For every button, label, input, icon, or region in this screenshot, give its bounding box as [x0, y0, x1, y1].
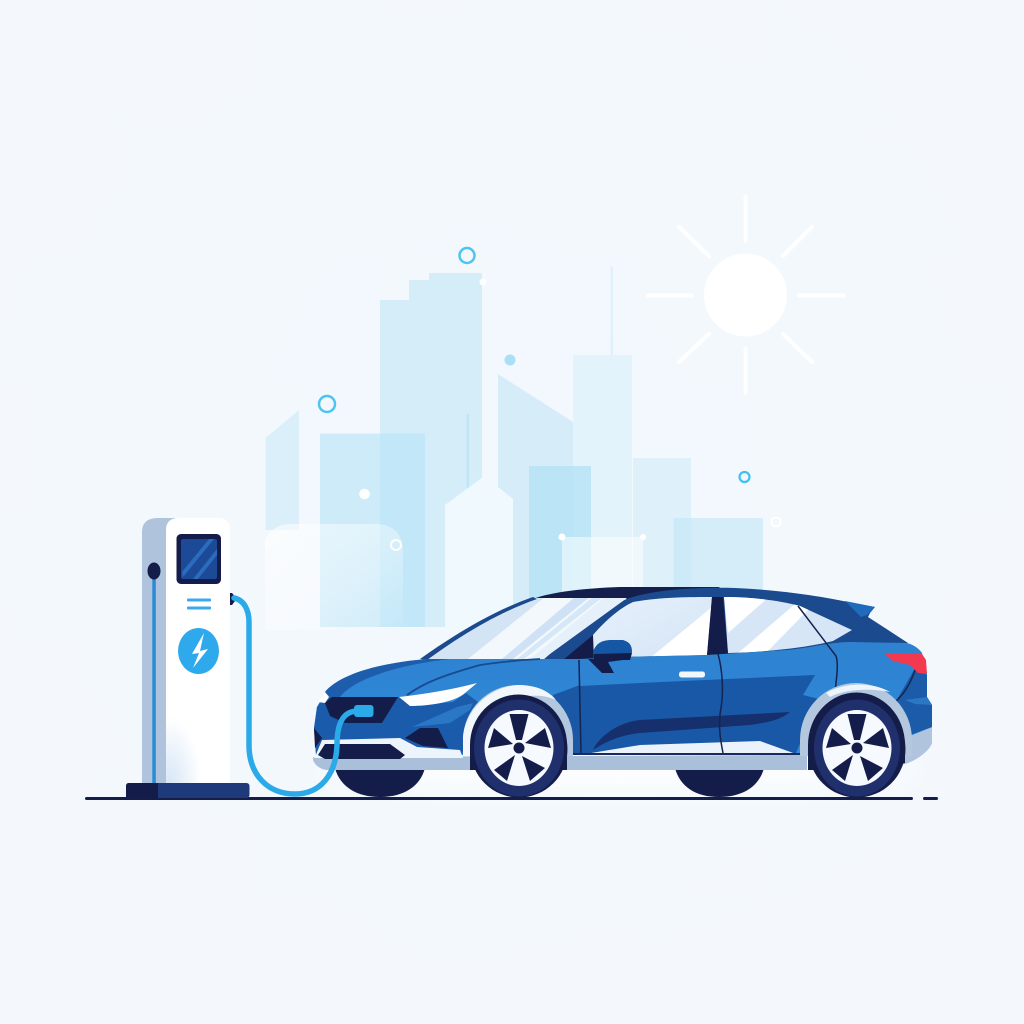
body shell	[314, 642, 932, 755]
building: block overlapping tower	[320, 434, 425, 627]
building: white pentagon	[445, 477, 513, 630]
screen	[176, 534, 221, 584]
cable socket	[230, 593, 235, 605]
building: tall tower	[380, 273, 482, 627]
taillight	[885, 654, 927, 674]
antenna: right tower	[610, 267, 613, 355]
sill silver	[313, 755, 807, 770]
building: left slanted	[266, 410, 299, 530]
city skyline	[265, 248, 780, 630]
a pillar shadow	[563, 635, 594, 660]
status lines	[187, 598, 211, 610]
roof dark strip	[533, 587, 720, 600]
charging station	[126, 518, 250, 798]
front fender highlight	[412, 703, 473, 727]
building: mid block	[529, 466, 591, 600]
hood shadow band	[325, 659, 450, 697]
headlight	[399, 683, 477, 706]
rear wheel	[808, 700, 906, 798]
grille	[325, 697, 398, 723]
charging cable and plug	[234, 598, 374, 794]
left bumper notch	[314, 728, 322, 748]
corner light	[318, 692, 329, 703]
building: antenna tower	[573, 355, 632, 600]
door sculpt stripe	[593, 712, 790, 750]
door handle	[679, 672, 705, 678]
front wheel arch	[463, 685, 573, 770]
white bumper trim	[313, 738, 463, 758]
building: low right block	[674, 518, 763, 590]
underbody shadows	[335, 768, 764, 797]
side air intake	[405, 728, 448, 748]
station front panel	[166, 518, 230, 783]
building: low translucent	[562, 537, 643, 592]
soft glow under the scene	[320, 748, 920, 792]
hood crease	[407, 659, 540, 695]
front wheel	[470, 700, 568, 798]
roof and pillars	[543, 588, 908, 665]
windshield	[427, 597, 627, 659]
rear wheel arch	[800, 683, 912, 770]
building: front rounded translucent	[265, 524, 403, 630]
lightning badge	[178, 628, 219, 674]
side indicator and line	[148, 562, 160, 783]
dots and rings	[319, 248, 780, 550]
side window front	[593, 597, 712, 658]
sun	[648, 197, 844, 393]
spoiler	[845, 601, 875, 617]
rear lower panel	[895, 668, 932, 735]
side sill highlight	[585, 741, 796, 754]
building: right block	[633, 458, 691, 593]
antenna: tower	[466, 414, 469, 488]
door seams	[579, 606, 915, 753]
illustration: electric car charging in front of a city	[85, 195, 938, 800]
station base	[126, 783, 250, 798]
windshield pillar	[420, 597, 537, 660]
front bumper panel	[314, 693, 478, 755]
side mirror	[588, 640, 632, 673]
building: slanted roof	[498, 374, 573, 627]
side window rear	[724, 596, 852, 654]
car	[313, 587, 932, 798]
b pillar	[707, 597, 728, 655]
door lower panel	[580, 675, 823, 755]
ground line	[85, 797, 938, 800]
station side panel	[142, 518, 175, 783]
lower grille	[318, 744, 405, 759]
rear bumper silver	[880, 723, 932, 765]
